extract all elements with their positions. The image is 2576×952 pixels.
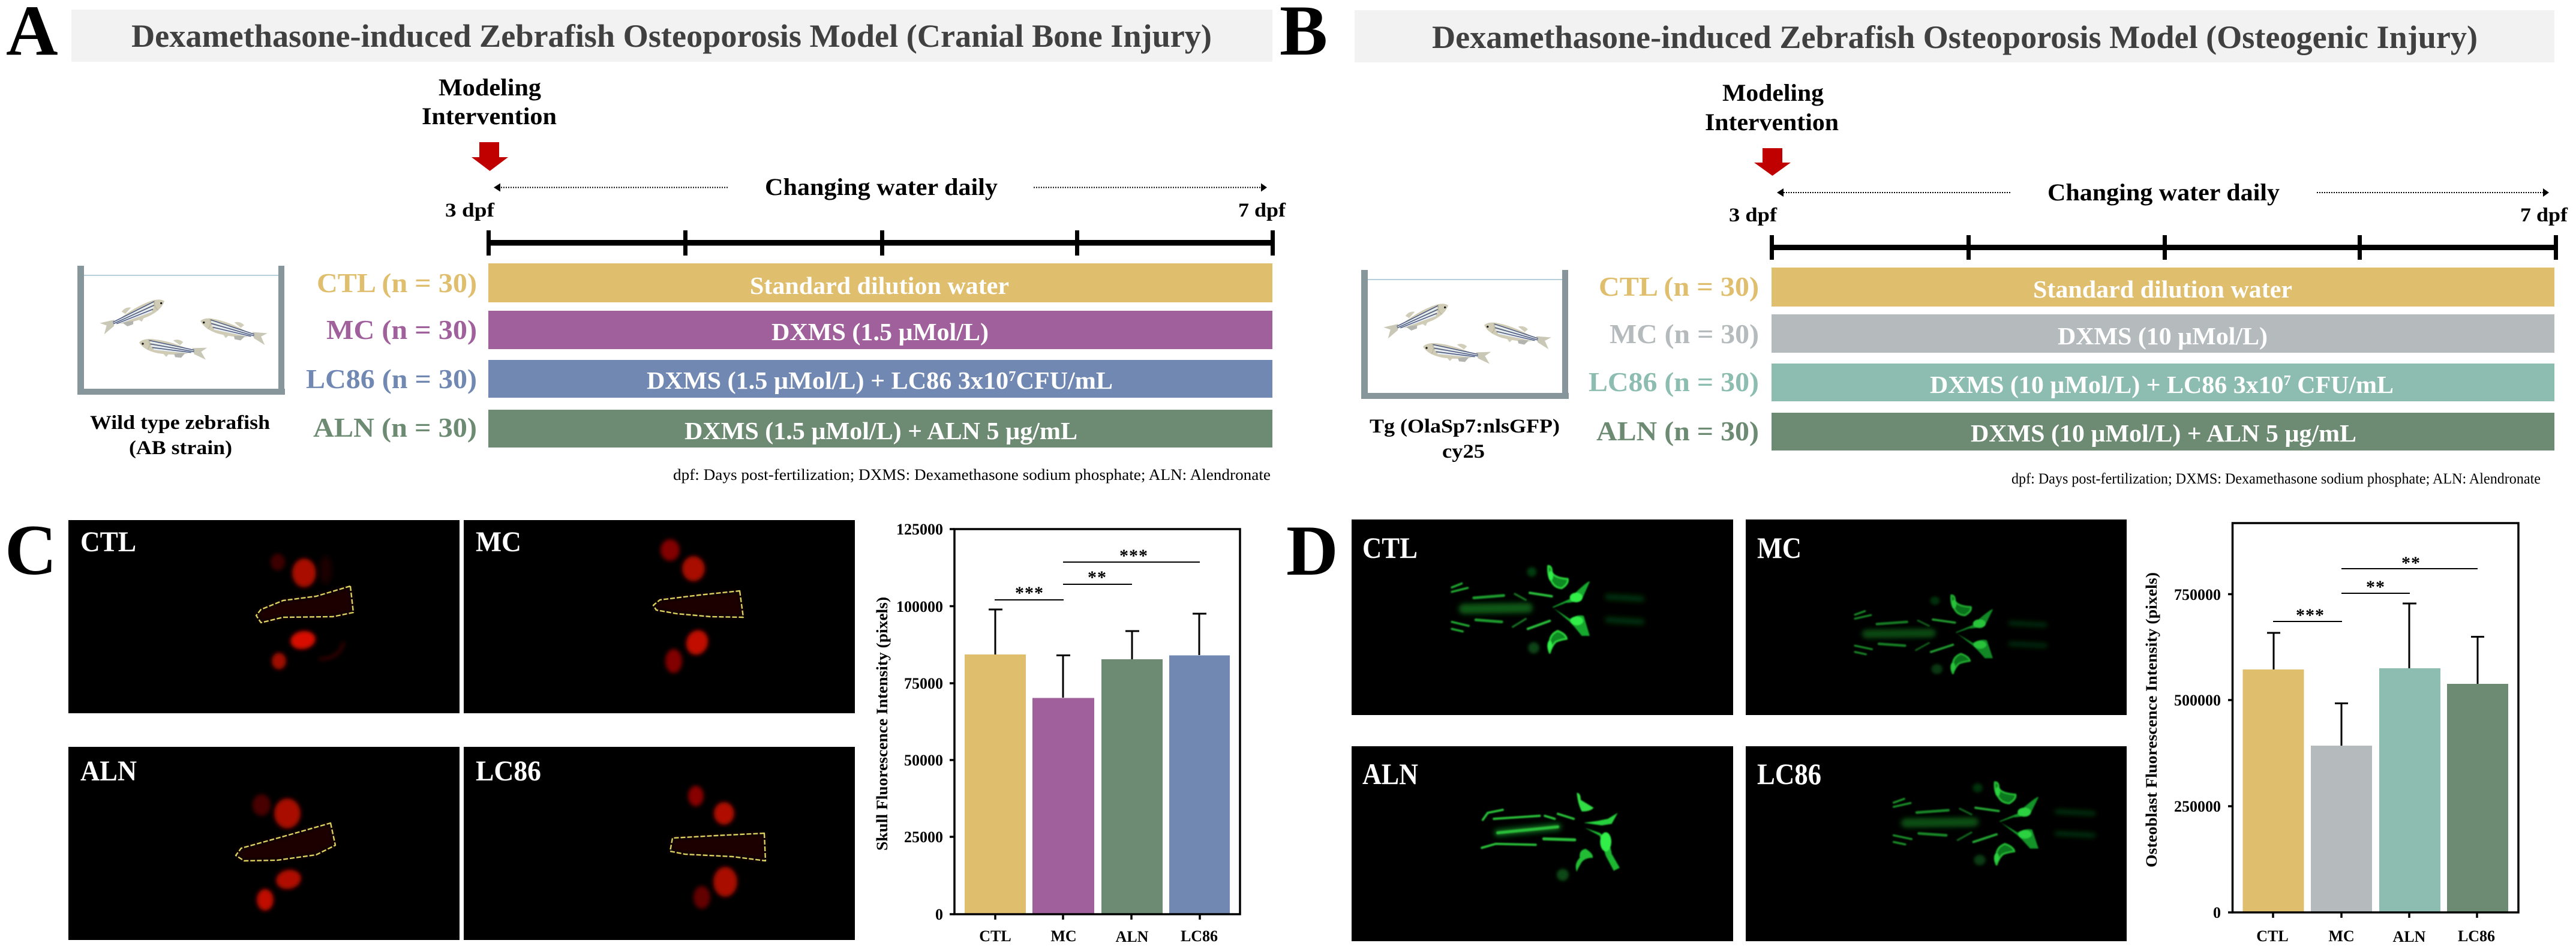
micrograph: MC green bbox=[1746, 519, 2127, 715]
micrograph: MC red bbox=[464, 520, 855, 713]
error bars bbox=[2267, 603, 2484, 746]
y axis title: Osteoblast Fluorescence Intensity (pixels) bbox=[2143, 572, 2160, 867]
icon: red down arrow bbox=[472, 142, 508, 171]
group MC row bbox=[326, 311, 1272, 349]
group ALN row: ALN (n = 30) bbox=[313, 412, 477, 443]
group ALN row: DXMS (10 µMol/L) + ALN 5 µg/mL bbox=[1971, 419, 2356, 447]
group CTL row bbox=[317, 263, 1272, 302]
significance brackets: *** bbox=[1119, 546, 1148, 566]
tank caption: Tg (OlaSp7:nlsGFP) bbox=[1370, 416, 1560, 437]
panel letter C: C bbox=[5, 510, 57, 590]
changing water daily span: Changing water daily bbox=[2047, 179, 2280, 206]
y axis numbers bbox=[2174, 586, 2221, 921]
y axis numbers: 0 bbox=[2213, 904, 2221, 921]
panel D: osteoblast fluorescence bbox=[1286, 510, 2518, 945]
significance brackets: *** bbox=[2296, 605, 2325, 625]
group CTL row: Standard dilution water bbox=[2033, 275, 2292, 303]
timeline bbox=[1729, 205, 2568, 260]
panel C: skull fluorescence bbox=[5, 510, 1240, 945]
y axis numbers: 50000 bbox=[904, 752, 943, 769]
significance brackets: ** bbox=[2366, 577, 2385, 597]
micrograph: CTL green bbox=[1352, 519, 1733, 715]
micrograph: LC86 red: LC86 bbox=[476, 755, 541, 787]
group MC row: MC (n = 30) bbox=[1610, 319, 1759, 349]
micrograph: MC green: MC bbox=[1757, 531, 1802, 564]
group MC row: DXMS (10 µMol/L) bbox=[2058, 322, 2268, 350]
axes frame and ticks bbox=[2228, 523, 2518, 918]
group LC86 row: DXMS (1.5 µMol/L) + LC86 3x10 bbox=[647, 367, 999, 394]
bars bbox=[965, 654, 1230, 914]
micrograph: MC red: MC bbox=[476, 526, 521, 558]
significance brackets: *** bbox=[1015, 583, 1044, 603]
timeline bbox=[445, 200, 1286, 256]
micrograph: ALN red bbox=[68, 747, 460, 940]
group ALN row: ALN (n = 30) bbox=[1596, 416, 1759, 446]
modeling intervention label: Intervention bbox=[1705, 109, 1839, 136]
modeling intervention label: Modeling bbox=[1722, 79, 1824, 106]
group LC86 row bbox=[306, 360, 1272, 398]
group ALN row bbox=[313, 410, 1272, 448]
x axis labels: MC bbox=[2328, 927, 2355, 945]
modeling intervention label bbox=[422, 74, 557, 130]
significance brackets: ** bbox=[1088, 567, 1107, 587]
group MC row: DXMS (1.5 µMol/L) bbox=[771, 318, 989, 346]
tank caption bbox=[90, 412, 270, 459]
y axis numbers: 750000 bbox=[2174, 586, 2221, 603]
y axis numbers: 100000 bbox=[896, 598, 943, 615]
panel A: cranial bone injury model design bbox=[6, 0, 1286, 483]
significance brackets bbox=[2273, 553, 2478, 625]
y axis numbers: 250000 bbox=[2174, 798, 2221, 815]
changing water daily span: Changing water daily bbox=[765, 173, 998, 200]
tank caption bbox=[1370, 416, 1560, 463]
x axis labels: MC bbox=[1050, 927, 1077, 945]
group LC86 row: 7 bbox=[1008, 369, 1016, 385]
changing water daily span bbox=[1777, 179, 2549, 206]
micrograph: LC86 green bbox=[1746, 746, 2127, 941]
micrograph: CTL red: CTL bbox=[80, 526, 136, 558]
x axis labels: LC86 bbox=[1181, 927, 1218, 945]
x axis labels: ALN bbox=[2393, 928, 2426, 945]
micrograph: ALN red: ALN bbox=[80, 755, 137, 787]
panel letter D: D bbox=[1286, 510, 1338, 590]
micrograph: ALN green: ALN bbox=[1362, 757, 1418, 791]
group LC86 row: CFU/mL bbox=[1016, 367, 1113, 394]
error bars bbox=[989, 609, 1206, 698]
bar chart: osteoblast fluorescence intensity bbox=[2143, 523, 2518, 945]
timeline: 3 dpf bbox=[1729, 205, 1778, 226]
timeline: 7 dpf bbox=[2520, 205, 2568, 226]
group CTL row: Standard dilution water bbox=[750, 272, 1009, 299]
axes frame and ticks bbox=[950, 529, 1240, 920]
heading A: Dexamethasone-induced Zebrafish Osteoporosis Model (Cranial Bone Injury) bbox=[131, 18, 1212, 54]
modeling intervention label: Modeling bbox=[439, 74, 541, 101]
group LC86 row: CFU/mL bbox=[2291, 371, 2394, 398]
x axis labels bbox=[979, 927, 1218, 945]
y axis numbers: 125000 bbox=[896, 521, 943, 538]
timeline: 7 dpf bbox=[1238, 200, 1286, 221]
y axis title: Skull Fluorescence Intensity (pixels) bbox=[873, 597, 891, 851]
group ALN row: DXMS (1.5 µMol/L) + ALN 5 µg/mL bbox=[684, 417, 1077, 445]
tank caption: Wild type zebrafish bbox=[90, 412, 270, 434]
icon: zebrafish tank bbox=[1361, 270, 1569, 399]
micrograph: LC86 green: LC86 bbox=[1757, 757, 1821, 791]
x axis labels: ALN bbox=[1116, 928, 1149, 945]
timeline: 3 dpf bbox=[445, 200, 495, 221]
footnote A: dpf: Days post-fertilization; DXMS: Dexamethasone sodium phosphate; ALN: Alendronate bbox=[673, 466, 1271, 483]
y axis numbers bbox=[896, 521, 943, 923]
heading A bbox=[71, 10, 1272, 62]
group ALN row bbox=[1596, 413, 2554, 451]
x axis labels: CTL bbox=[2256, 927, 2289, 945]
x axis labels: CTL bbox=[979, 927, 1011, 945]
group CTL row: CTL (n = 30) bbox=[317, 268, 477, 298]
group MC row: MC (n = 30) bbox=[326, 314, 477, 345]
y axis numbers: 75000 bbox=[904, 675, 943, 692]
heading B bbox=[1355, 10, 2554, 62]
group LC86 row: LC86 (n = 30) bbox=[1589, 367, 1759, 397]
micrograph: CTL green: CTL bbox=[1362, 531, 1418, 564]
panel B: osteogenic injury model design bbox=[1280, 0, 2568, 487]
group CTL row: CTL (n = 30) bbox=[1599, 271, 1759, 302]
micrograph: LC86 red bbox=[464, 747, 855, 940]
tank caption: cy25 bbox=[1442, 441, 1485, 463]
group LC86 row bbox=[1589, 364, 2554, 401]
micrograph: ALN green bbox=[1352, 746, 1733, 941]
changing water daily span bbox=[494, 173, 1267, 200]
group LC86 row: LC86 (n = 30) bbox=[306, 364, 477, 394]
modeling intervention label bbox=[1705, 79, 1839, 136]
bar chart: skull fluorescence intensity bbox=[873, 521, 1240, 945]
significance brackets: ** bbox=[2401, 553, 2421, 573]
significance brackets bbox=[995, 546, 1200, 603]
micrograph: CTL red bbox=[68, 520, 460, 713]
heading B: Dexamethasone-induced Zebrafish Osteoporosis Model (Osteogenic Injury) bbox=[1432, 19, 2478, 55]
modeling intervention label: Intervention bbox=[422, 103, 557, 130]
y axis numbers: 0 bbox=[935, 906, 943, 923]
bars bbox=[2242, 668, 2508, 912]
footnote B: dpf: Days post-fertilization; DXMS: Dexamethasone sodium phosphate; ALN: Alendronate bbox=[2011, 471, 2541, 487]
group MC row bbox=[1610, 314, 2554, 353]
y axis numbers: 25000 bbox=[904, 828, 943, 846]
icon: zebrafish tank bbox=[77, 266, 285, 395]
x axis labels: LC86 bbox=[2458, 927, 2495, 945]
group CTL row bbox=[1599, 268, 2554, 307]
group LC86 row: 7 bbox=[2284, 373, 2291, 389]
tank caption: (AB strain) bbox=[129, 437, 232, 459]
y axis numbers: 500000 bbox=[2174, 692, 2221, 709]
x axis labels bbox=[2256, 927, 2495, 945]
group LC86 row: DXMS (10 µMol/L) + LC86 3x10 bbox=[1930, 371, 2276, 398]
icon: red down arrow bbox=[1754, 148, 1791, 176]
